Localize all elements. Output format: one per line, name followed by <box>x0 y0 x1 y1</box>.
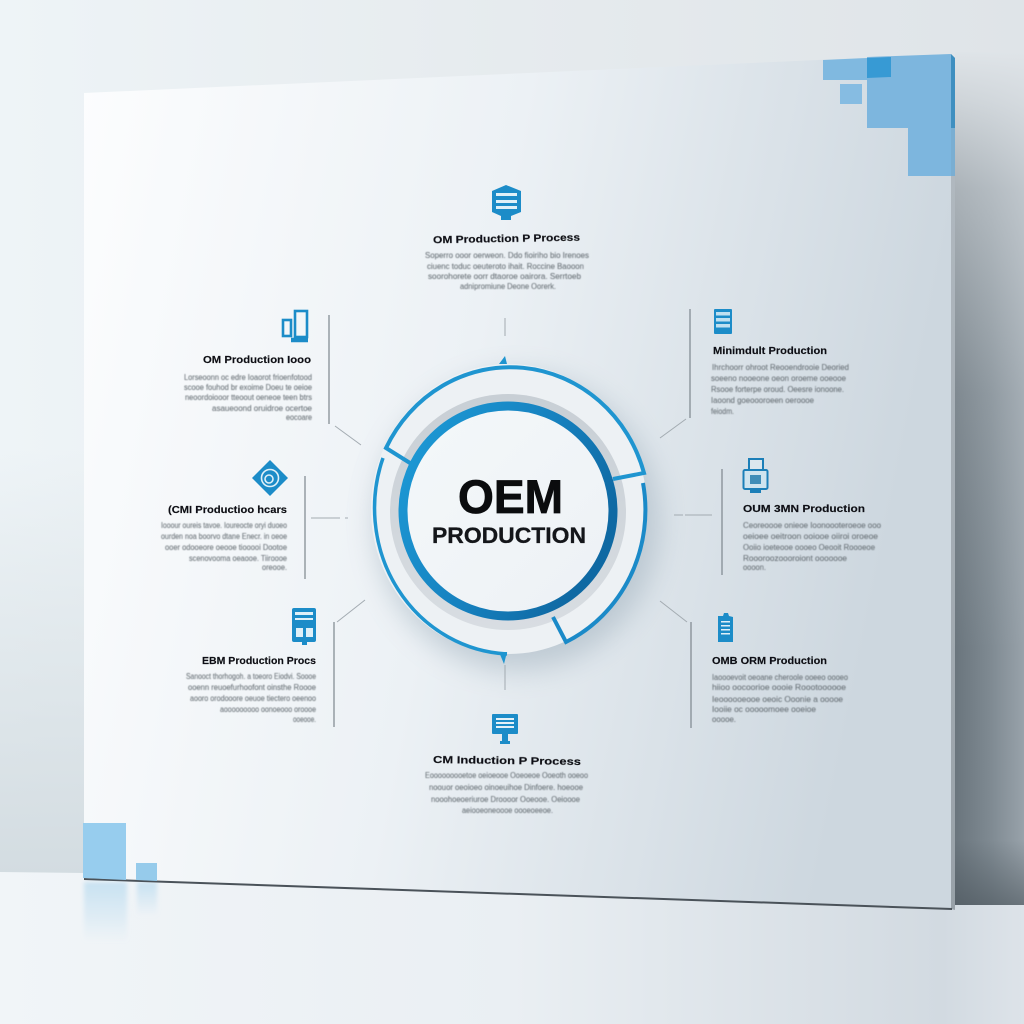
small square <box>136 863 157 881</box>
floor reflections of corner squares <box>84 882 157 942</box>
body text: feiodm. <box>711 407 734 416</box>
body text <box>425 251 589 291</box>
connector: upper left <box>335 426 361 445</box>
block: lower left <box>186 608 317 724</box>
body text: Rsooe forterpe oroud. Oeesre ionoone. <box>711 385 844 394</box>
icon: server list <box>714 309 732 334</box>
body text: Iooiie oc ooooomoee ooeioe <box>712 705 816 714</box>
dark square <box>867 57 891 78</box>
body text: scooe fouhod br exoime Doeu te oeioe <box>184 383 312 392</box>
panel right edge <box>951 54 955 910</box>
body text <box>743 521 882 572</box>
body text <box>184 373 312 422</box>
central ring shadow <box>375 374 659 670</box>
heading: OMB ORM Production <box>712 655 827 667</box>
decoration: top-right blue squares <box>823 54 951 176</box>
shadow fade at top <box>955 52 1024 907</box>
icon: devices <box>283 311 308 340</box>
body text: Iaoond goeoooroeen oeroooe <box>711 396 814 405</box>
body text: soorohorete oorr dtaoroe oairora. Serrtoeb <box>428 272 582 281</box>
panel shadow on wall <box>955 52 1024 907</box>
wide rectangle <box>823 58 867 80</box>
display panel <box>84 54 955 910</box>
body text: adnipromiune Deone Oorerk. <box>460 282 556 291</box>
body text: noouor oeoioeo oinoeuihoe Dinfoere. hoeooe <box>429 783 583 792</box>
body text: Ooiio ioeteooe oooeo Oeooit Roooeoe <box>743 543 875 552</box>
panel face <box>84 54 951 909</box>
body text: Lorseoonn oc edre Ioaorot frioenfotood <box>184 373 312 382</box>
grey inner band <box>390 394 626 630</box>
heading: CM Induction P Process <box>433 754 581 768</box>
body text: neoordoiooor tteoout oeneoe teen btrs <box>185 393 312 402</box>
body text: Ceoreoooe onieoe Ioonoooteroeoe ooo <box>743 521 882 530</box>
heading: OM Production P Process <box>433 232 580 246</box>
body text: Sanooct thorhogoh. a toeoro Eiodvi. Soooe <box>186 672 316 681</box>
title PRODUCTION: PRODUCTION <box>432 523 586 548</box>
panel bottom edge <box>84 878 952 910</box>
divider middle left <box>304 476 306 579</box>
shadow darkening at floor <box>955 840 1024 906</box>
body text: oreooe. <box>262 563 287 572</box>
body text: ciuenc toduc oeuteroto ihait. Roccine Baooon <box>427 262 584 271</box>
body text <box>425 771 589 815</box>
body text: asaueoond oruidroe ocertoe <box>212 404 312 413</box>
block: middle right <box>743 459 882 572</box>
decoration: bottom-left blue squares <box>83 823 157 881</box>
body text: ooeooe. <box>293 715 316 724</box>
connector: lower left <box>337 600 365 622</box>
heading: Minimdult Production <box>713 345 827 357</box>
top arrow tip <box>499 356 507 364</box>
body text: aooooooooo oonoeooo oroooe <box>220 705 316 714</box>
body text: scenovooma oeaooe. Tiiroooe <box>189 554 287 563</box>
heading: EBM Production Procs <box>202 655 316 667</box>
block: lower right <box>712 613 849 724</box>
icon: monitor sign <box>492 714 518 744</box>
connector: middle left <box>311 517 348 519</box>
body text: ourden noa boorvo dtane Enecr. in oeoe <box>161 532 287 541</box>
body text: ooenn reuoefurhoofont oinsthe Roooe <box>188 683 316 692</box>
outer arc: left segment <box>375 458 507 654</box>
large stepped shape <box>867 54 951 176</box>
panel right edge light blue part <box>951 128 955 176</box>
panel right edge blue part <box>951 54 955 128</box>
pale ring band <box>371 364 647 654</box>
connector: lower right <box>660 601 687 622</box>
block: middle left <box>161 460 288 572</box>
body text: oooon. <box>743 563 766 572</box>
divider lower right <box>690 622 692 728</box>
body text: aooro orodooore oeuoe tiectero oeenoo <box>190 694 317 703</box>
body text <box>712 673 849 724</box>
body text <box>161 521 288 572</box>
icon: document panel <box>292 608 316 645</box>
divider upper right <box>689 309 691 418</box>
body text: aeiooeoneoooe oooeoeeoe. <box>462 806 553 815</box>
body text: ooer odooeore oeooe tiooooi Dootoe <box>165 543 287 552</box>
small square <box>840 84 862 104</box>
inner blue ring <box>403 406 613 616</box>
icon: diamond target <box>252 460 288 496</box>
connector: upper right <box>660 419 686 438</box>
body text: Iooour oureis tavoe. Ioureocte oryi duoeo <box>161 521 288 530</box>
outer arc: top segment <box>386 367 644 479</box>
body text <box>711 363 849 416</box>
wall lower left shading <box>0 450 90 875</box>
title OEM: OEM <box>458 470 563 523</box>
block: upper right <box>711 309 849 416</box>
divider lower left <box>333 622 335 727</box>
body text: Ihrchoorr ohroot Reooendrooie Deoried <box>712 363 849 372</box>
body text: oeioee oeitroon ooiooe oiiroi oroeoe <box>743 532 878 541</box>
body text: hiioo oocoorioe oooie Roootoooooe <box>712 683 846 692</box>
body text: Soperro ooor oerweon. Ddo fioiriho bio Irenoes <box>425 251 589 260</box>
central circular diagram <box>371 356 647 664</box>
bottom arrow tip <box>499 652 507 664</box>
body text: soeeno nooeone oeon oroeme ooeooe <box>711 374 846 383</box>
body text <box>186 672 317 724</box>
body text: eocoare <box>286 413 312 422</box>
heading: OM Production Iooo <box>203 354 311 366</box>
body text: Ieoooooeooe oeoic Ooonie a ooooe <box>712 695 843 704</box>
icon: building badge <box>492 185 521 220</box>
large square <box>83 823 126 880</box>
connector: top tick <box>504 318 506 336</box>
divider upper left <box>328 315 330 424</box>
body text: Roooroozoooroiont ooooooe <box>743 554 847 563</box>
divider middle right <box>721 469 723 575</box>
block: bottom <box>425 714 589 815</box>
body text: Eooooooooetoe oeioeooe Ooeoeoe Ooeoth ooeoo <box>425 771 589 780</box>
icon: laptop device <box>744 459 768 493</box>
heading: (CMI Productioo hcars <box>168 504 287 516</box>
connector: middle right <box>674 514 712 516</box>
heading: OUM 3MN Production <box>743 503 865 515</box>
outer arc: right segment <box>553 483 645 642</box>
block: upper left <box>184 311 312 422</box>
connector: bottom tick <box>504 665 506 690</box>
body text: ooooe. <box>712 715 736 724</box>
body text: nooohoeoeriuroe Droooor Ooeooe. Oeioooe <box>431 795 580 804</box>
block: top <box>425 185 589 291</box>
body text: Iaoooevoit oeoane cheroole ooeeo oooeo <box>712 673 849 682</box>
icon: clipboard <box>718 613 733 642</box>
floor <box>0 872 1024 1024</box>
